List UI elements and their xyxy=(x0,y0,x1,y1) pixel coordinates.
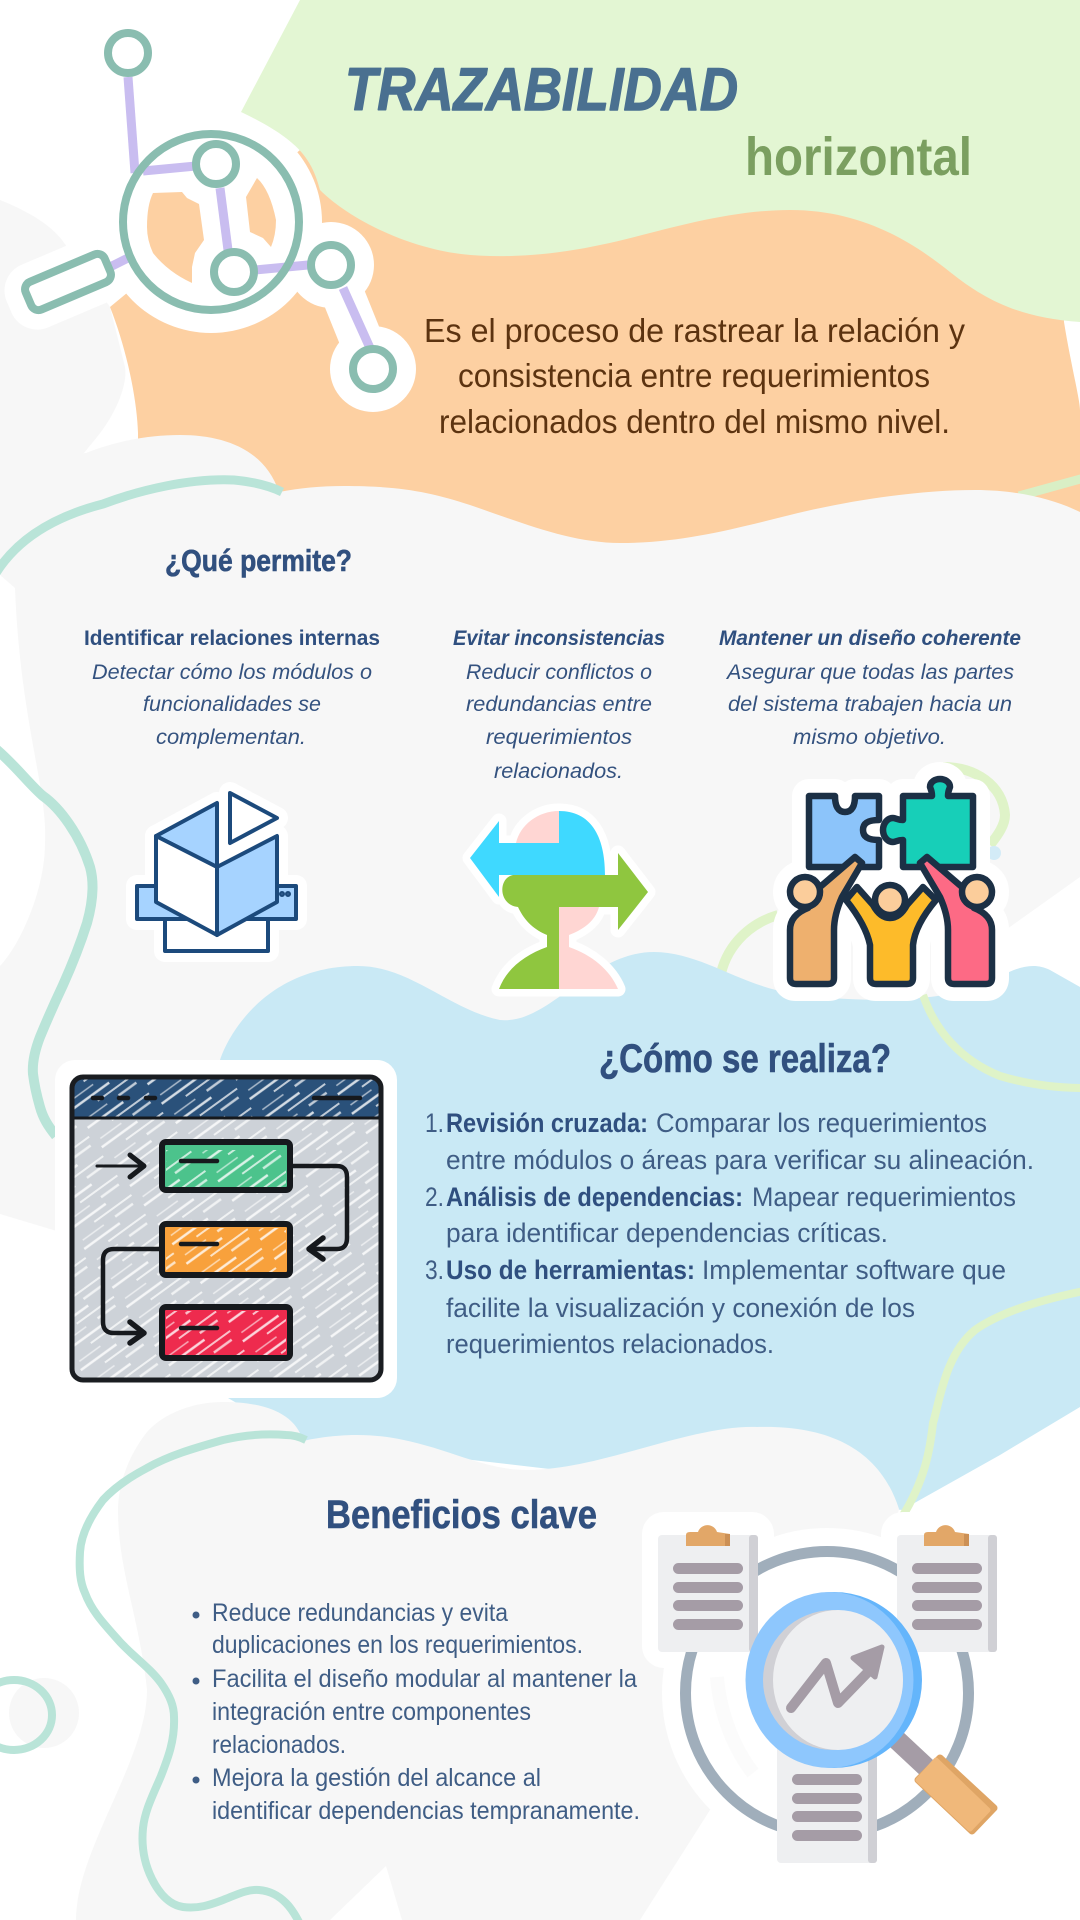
column: relaciones internas: Identificar relaciones internas xyxy=(84,627,380,650)
background: main grey panel xyxy=(0,435,1080,1232)
benefits list: Mejora la gestión del alcance al xyxy=(212,1764,541,1792)
icon: modular box xyxy=(137,793,296,951)
person middle xyxy=(846,887,936,984)
benefits list: Reduce redundancias y evita xyxy=(212,1599,508,1627)
icon: network magnifier xyxy=(0,33,416,412)
decorative teal stroke benefits xyxy=(80,1434,306,1920)
item 2: Análisis de dependencias: xyxy=(446,1182,743,1212)
decorative green stroke right xyxy=(902,1291,1080,1517)
column: inconsistencias xyxy=(453,627,665,783)
item 1: entre módulos o áreas para verificar su alineación. xyxy=(446,1145,1034,1175)
column: relaciones internas xyxy=(84,627,380,749)
icon halo xyxy=(0,111,416,412)
decorative teal stroke left xyxy=(0,749,93,1136)
sticker: flowchart window xyxy=(55,1060,397,1398)
item 1: Comparar los requerimientos xyxy=(656,1108,987,1138)
column: inconsistencias: Evitar inconsistencias xyxy=(453,627,665,650)
item 3 xyxy=(425,1255,1006,1359)
column: inconsistencias: redundancias entre xyxy=(466,693,652,716)
decorative green line top right xyxy=(1019,478,1080,496)
column: relaciones internas: complementan. xyxy=(156,726,306,749)
intro paragraph: Es el proceso de rastrear la relación y xyxy=(424,312,965,349)
item 2: 2. xyxy=(425,1182,444,1212)
intro paragraph xyxy=(424,312,965,440)
column: diseño coherente: Mantener un diseño coherente xyxy=(719,627,1021,650)
big ring xyxy=(686,1552,968,1834)
heading: Cómo se realiza: ¿Cómo se realiza? xyxy=(599,1037,891,1081)
heading: Beneficios clave: Beneficios clave xyxy=(326,1493,597,1537)
magnifier lens xyxy=(746,1592,922,1768)
column: diseño coherente: mismo objetivo. xyxy=(793,726,946,749)
background: green blob xyxy=(241,0,1080,322)
window frame xyxy=(72,1077,381,1380)
ring and nodes xyxy=(23,33,393,389)
puzzle piece teal xyxy=(883,779,973,867)
item 3: Implementar software que xyxy=(702,1255,1006,1285)
icon halo xyxy=(642,1512,1013,1878)
icon: head with arrows xyxy=(470,811,648,989)
documents xyxy=(658,1535,997,1863)
benefits list: duplicaciones en los requerimientos. xyxy=(212,1631,583,1659)
background: left grey blob xyxy=(0,200,125,500)
benefits list: relacionados. xyxy=(212,1731,346,1759)
item 2 xyxy=(425,1182,1016,1248)
item 3: facilite la visualización y conexión de los xyxy=(446,1293,915,1323)
subtitle: horizontal xyxy=(745,127,972,187)
item 3: requerimientos relacionados. xyxy=(446,1329,774,1359)
column: relaciones internas: funcionalidades se xyxy=(143,693,321,716)
faint arc in ring xyxy=(717,1677,753,1773)
flow boxes xyxy=(162,1142,290,1358)
intro paragraph: relacionados dentro del mismo nivel. xyxy=(439,403,950,440)
document bars xyxy=(673,1563,982,1841)
column: inconsistencias: relacionados. xyxy=(494,760,623,783)
decorative ring bottom left xyxy=(0,1678,79,1750)
benefits list: Facilita el diseño modular al mantener la xyxy=(212,1665,637,1693)
item 2: Mapear requerimientos xyxy=(752,1182,1016,1212)
magnifier handle xyxy=(897,1740,994,1831)
icon: team with puzzle pieces xyxy=(790,779,992,984)
person right xyxy=(920,857,992,984)
connecting lines xyxy=(108,77,370,348)
background: peach blob xyxy=(110,150,1080,560)
flow arrows xyxy=(97,1155,347,1343)
decorative green stroke over blue xyxy=(923,995,1080,1088)
icon: magnifier and documents xyxy=(642,1512,1013,1878)
background: benefits grey panel xyxy=(76,1402,899,1920)
item 3: Uso de herramientas: xyxy=(446,1255,695,1285)
column: relaciones internas: Detectar cómo los módulos o xyxy=(92,661,372,684)
benefits list xyxy=(192,1599,640,1825)
item 1: Revisión cruzada: xyxy=(446,1108,648,1138)
benefits list: identificar dependencias tempranamente. xyxy=(212,1797,640,1825)
window header dashes xyxy=(93,1096,360,1100)
peach patches in ring xyxy=(147,178,276,283)
decorative green strokes around puzzle xyxy=(720,767,1005,978)
column: diseño coherente xyxy=(719,627,1021,749)
intro paragraph: consistencia entre requerimientos xyxy=(458,357,930,394)
title: TRAZABILIDAD xyxy=(345,56,738,123)
column: diseño coherente: del sistema trabajen hacia un xyxy=(728,693,1012,716)
decorative teal stroke top xyxy=(0,480,282,573)
item 3: 3. xyxy=(425,1255,444,1285)
item 1: 1. xyxy=(425,1108,444,1138)
clipboard clips xyxy=(686,1525,969,1546)
person left xyxy=(790,857,862,984)
heading: Qué permite: ¿Qué permite? xyxy=(165,543,352,578)
column: inconsistencias: Reducir conflictos o xyxy=(466,661,652,684)
column: diseño coherente: Asegurar que todas las partes xyxy=(725,661,1015,684)
item 2: para identificar dependencias críticas. xyxy=(446,1218,888,1248)
trend arrow xyxy=(791,1647,882,1708)
column: inconsistencias: requerimientos xyxy=(486,726,633,749)
background: blue blob xyxy=(220,952,1080,1510)
numbered list xyxy=(425,1108,1034,1359)
benefits list: integración entre componentes xyxy=(212,1698,531,1726)
puzzle piece blue xyxy=(809,796,879,867)
item 1 xyxy=(425,1108,1034,1175)
